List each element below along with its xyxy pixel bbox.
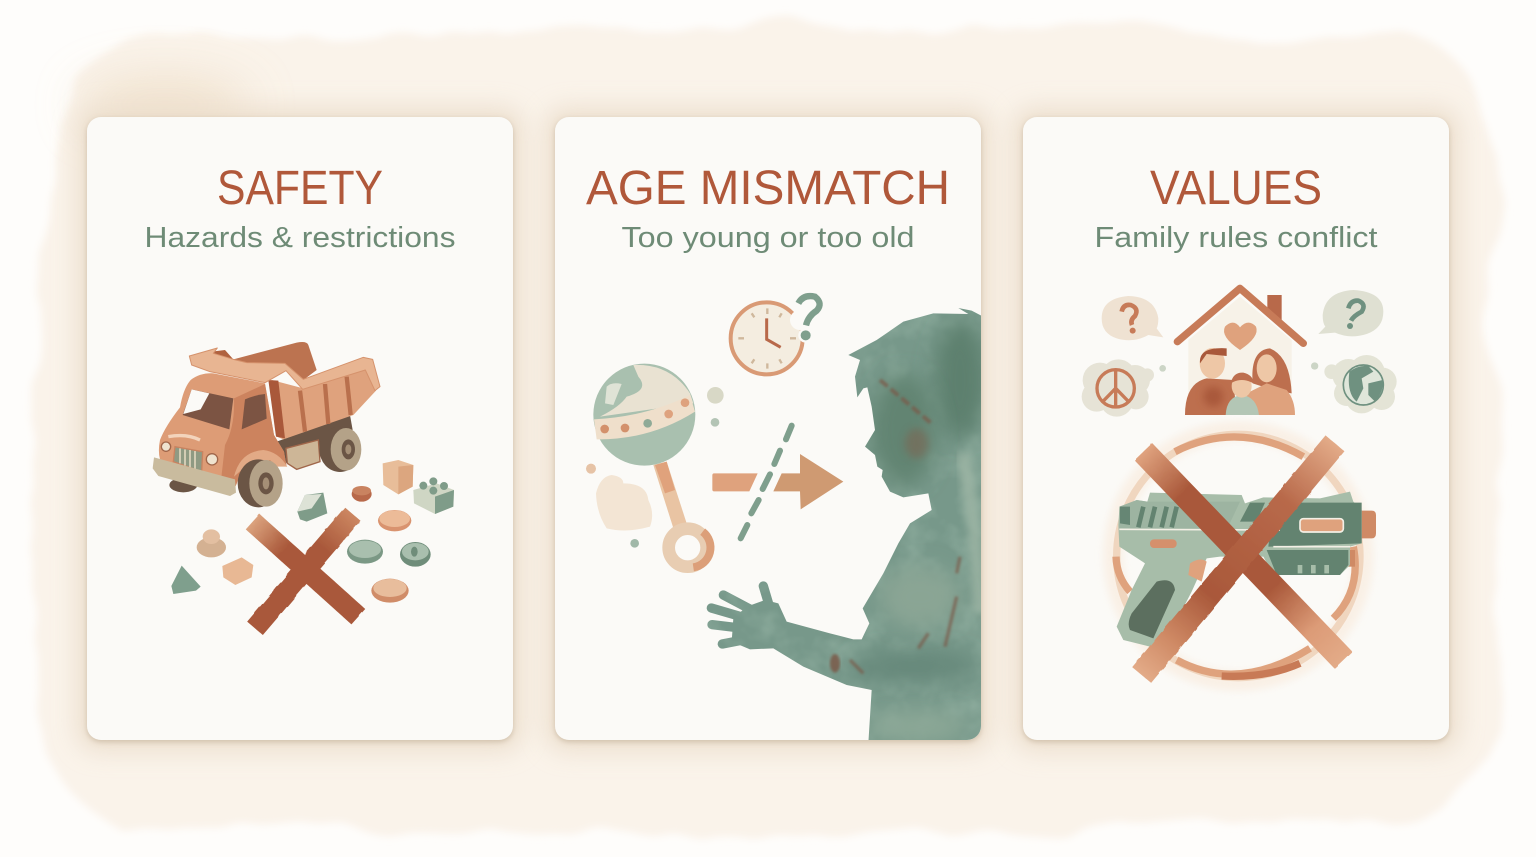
illustration: baby rattle [586,364,724,567]
ring behind gun [1113,431,1363,681]
heading: age mismatch: AGE MISMATCH [586,162,950,215]
illustration: toy dump truck [153,342,380,507]
panel: safety [87,117,513,740]
heading: safety: SAFETY [217,162,383,215]
toy gun [1117,492,1376,650]
illustration: child silhouette [703,300,987,747]
icon: question bubble left [1102,296,1163,340]
subheading: family rules conflict: Family rules conflict [1094,222,1378,254]
icon: red x mark [253,514,358,628]
illustration: small toy parts [171,460,454,603]
icon: clock with question mark [731,296,820,374]
heading: values: VALUES [1150,162,1322,215]
icon: peace thought bubble [1082,359,1166,417]
card background [1023,117,1449,740]
icon: globe thought bubble [1311,355,1397,413]
card background [555,117,981,740]
panel: values [1023,117,1449,740]
illustration: crossed-out toy gun [1113,431,1376,681]
subheading: hazards: Hazards & restrictions [144,222,456,254]
panel: age mismatch [555,117,987,747]
icon: question bubble right [1318,290,1383,336]
card background [87,117,513,740]
red x mark [1142,443,1343,675]
illustration: house with family [1177,288,1303,415]
subheading: too young or too old: Too young or too old [622,222,914,254]
arrow: blocked arrow with dashed barrier [712,426,843,538]
